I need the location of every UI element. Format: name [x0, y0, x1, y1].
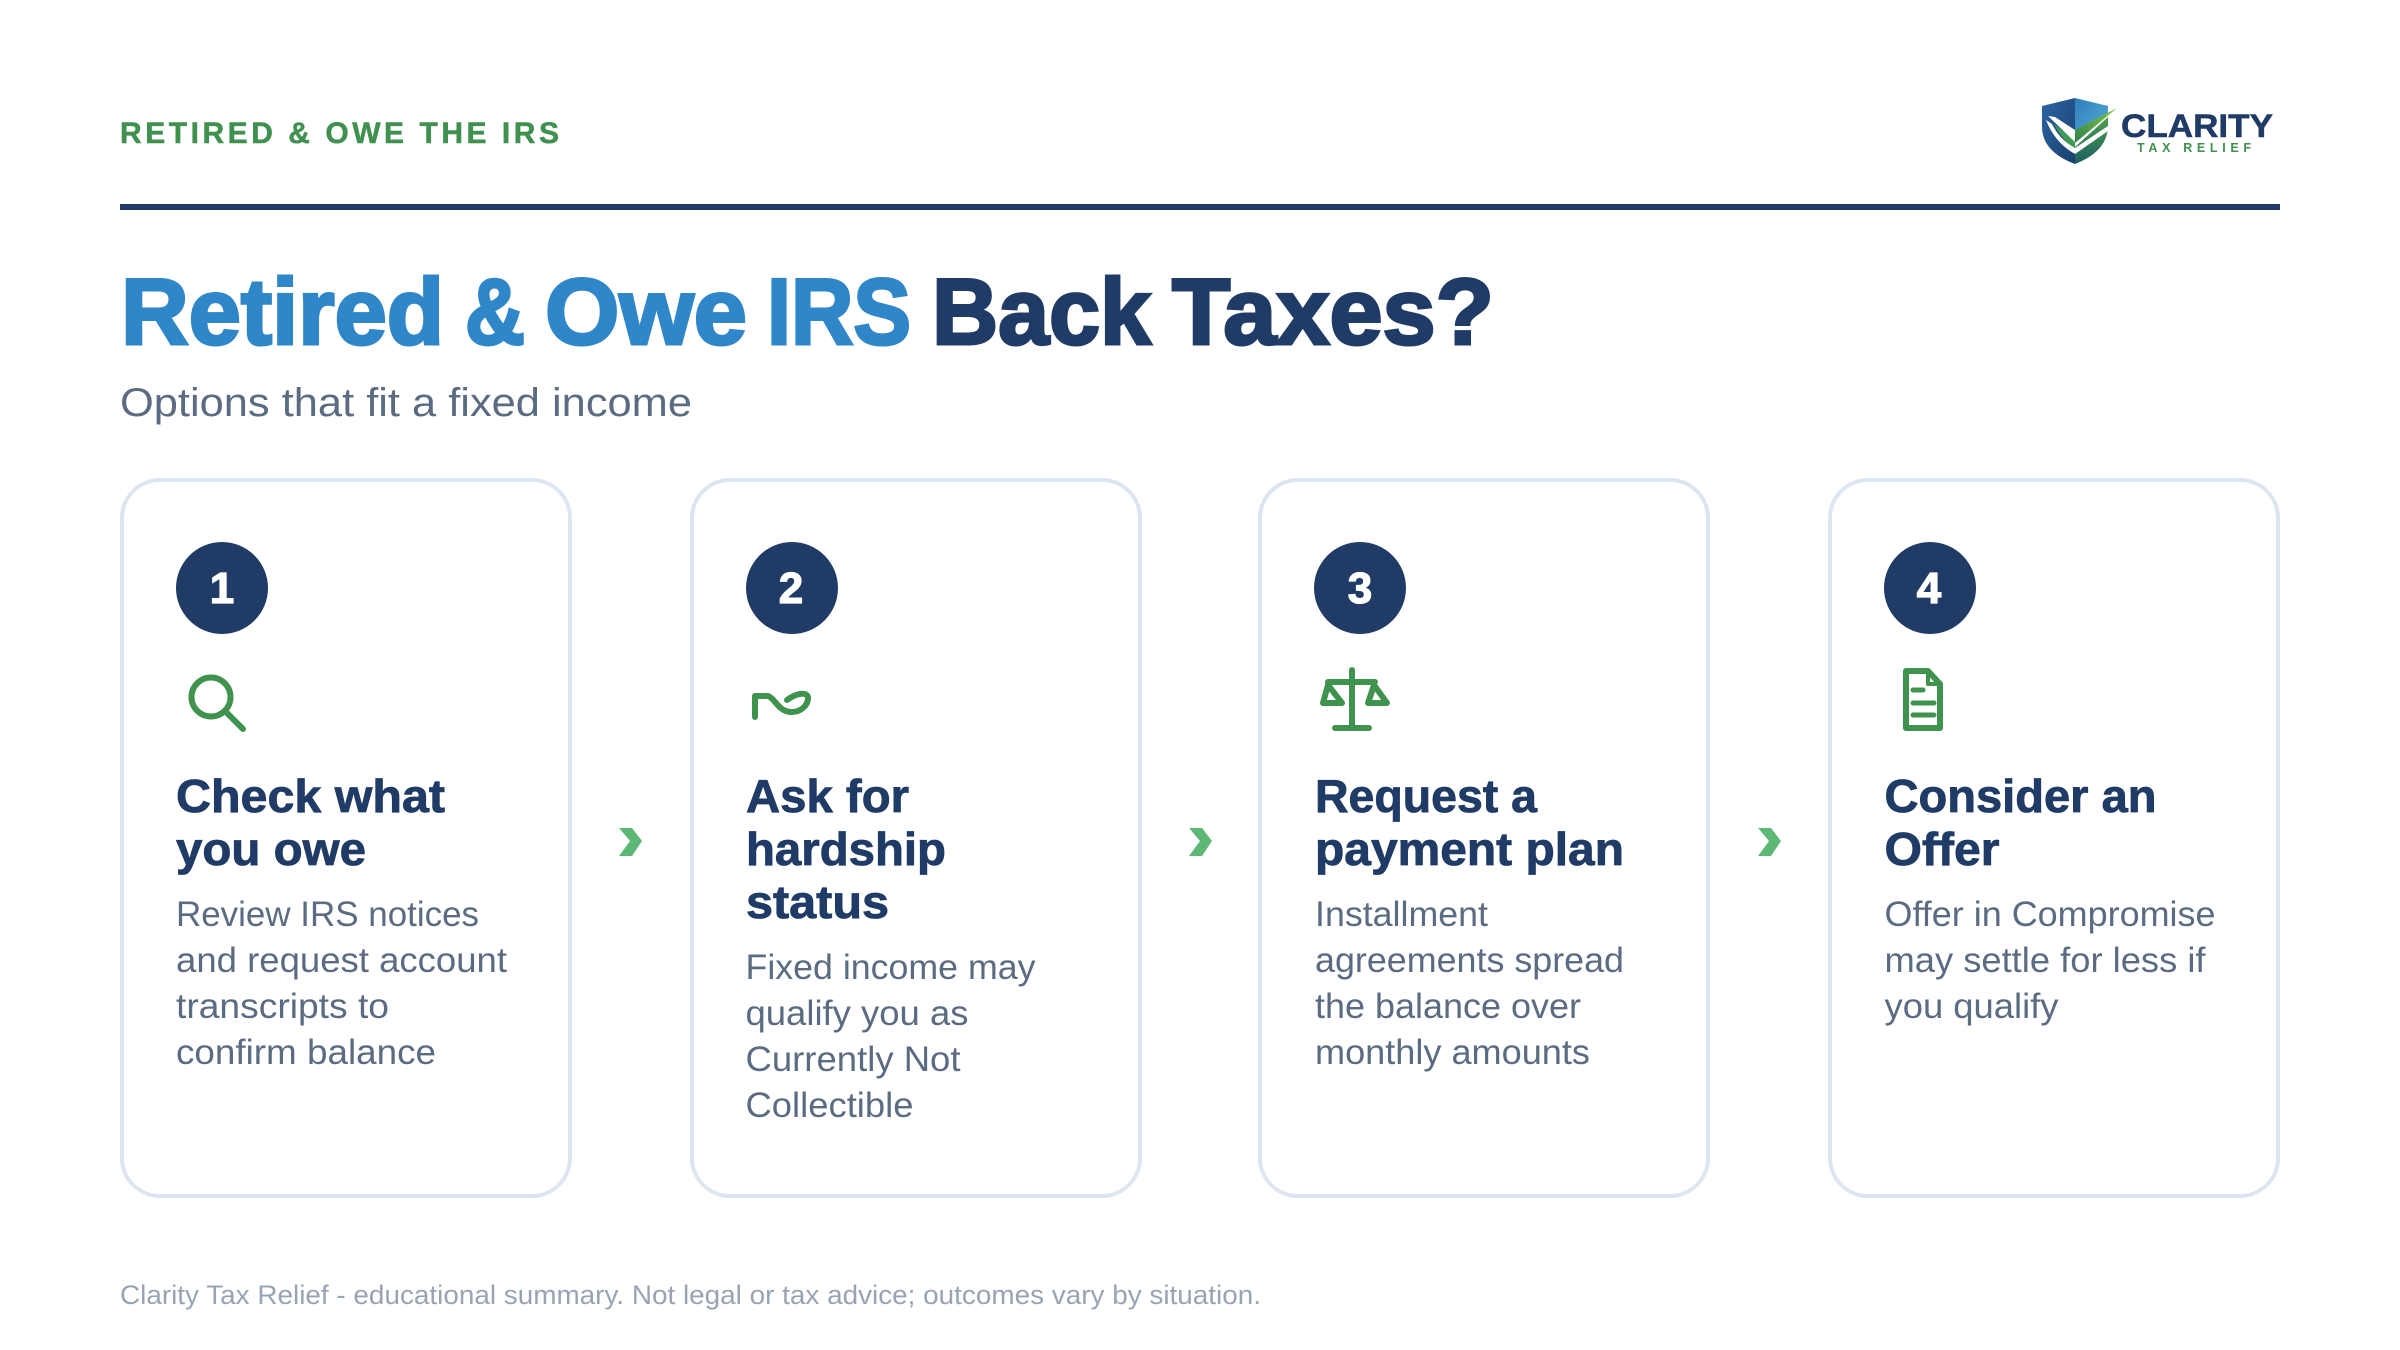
heading: step 3: Request a	[1315, 770, 1537, 822]
panel: step 4	[1830, 480, 2278, 1196]
arrow 1	[619, 828, 642, 856]
body: step 2: Collectible	[746, 1086, 914, 1125]
body: step 3: agreements spread	[1315, 941, 1624, 980]
body: step 4	[1884, 895, 2216, 1026]
body: step 3: Installment	[1315, 895, 1488, 934]
logo: Clarity Tax Relief	[2042, 98, 2273, 164]
eyebrow label: RETIRED & OWE THE IRS	[120, 117, 559, 150]
body: step 1: transcripts to	[176, 987, 389, 1026]
icon: document	[1906, 671, 1940, 728]
title: &	[465, 259, 525, 364]
title: Back	[932, 259, 1152, 364]
body: step 2	[746, 948, 1036, 1125]
heading: step 4: Consider an	[1884, 770, 2156, 822]
body: step 1: and request account	[176, 941, 507, 980]
icon: magnifying glass	[192, 678, 243, 729]
heading: step 4	[1884, 770, 2156, 875]
subtitle: Options that fit a fixed income	[120, 381, 692, 425]
icon: hand	[755, 694, 808, 717]
body: step 2: qualify you as	[746, 994, 968, 1033]
title: Taxes?	[1172, 259, 1494, 364]
body: step 1: Review IRS notices	[176, 895, 479, 934]
logo: Clarity Tax Relief: TAX RELIEF	[2137, 141, 2251, 155]
body: step 4: may settle for less if	[1884, 941, 2206, 980]
title: Owe	[545, 259, 747, 364]
heading: step 3	[1315, 770, 1624, 875]
body: step 2: Fixed income may	[746, 948, 1036, 987]
icon: balance scale	[1323, 670, 1387, 728]
heading: step 1: Check what	[176, 770, 445, 822]
heading: step 1: you owe	[176, 823, 366, 875]
title: Retired	[121, 259, 444, 364]
step number 4: 4	[1917, 564, 1942, 613]
arrow 2	[1189, 828, 1212, 856]
heading: step 2	[746, 770, 946, 928]
heading: step 2: hardship	[746, 823, 946, 875]
footer disclaimer: Clarity Tax Relief - educational summary. Not legal or tax advice; outcomes vary by situation.	[120, 1280, 1261, 1310]
logo: Clarity Tax Relief: CLARITY	[2121, 108, 2273, 144]
body: step 1	[176, 895, 507, 1072]
body: step 1: confirm balance	[176, 1033, 436, 1072]
title: IRS	[767, 259, 911, 364]
step number 2: 2	[779, 564, 803, 613]
step number 3	[1314, 542, 1406, 634]
step number 4	[1884, 542, 1976, 634]
step number 1	[176, 542, 268, 634]
body: step 3: the balance over	[1315, 987, 1581, 1026]
panel: step 3	[1260, 480, 1708, 1196]
panel: step 1	[122, 480, 570, 1196]
body: step 3	[1315, 895, 1624, 1072]
title	[121, 259, 1494, 364]
panel: step 2	[692, 480, 1140, 1196]
step number 2	[746, 542, 838, 634]
heading: step 2: Ask for	[746, 770, 909, 822]
heading: step 1	[176, 770, 445, 875]
body: step 3: monthly amounts	[1315, 1033, 1590, 1072]
body: step 4: Offer in Compromise	[1884, 895, 2216, 934]
step number 1: 1	[210, 564, 234, 613]
heading: step 2: status	[746, 876, 889, 928]
body: step 4: you qualify	[1884, 987, 2059, 1026]
body: step 2: Currently Not	[746, 1040, 961, 1079]
heading: step 4: Offer	[1884, 823, 2000, 875]
arrow 3	[1758, 828, 1781, 856]
step number 3: 3	[1348, 564, 1372, 613]
heading: step 3: payment plan	[1315, 823, 1624, 875]
header rule	[120, 204, 2280, 210]
